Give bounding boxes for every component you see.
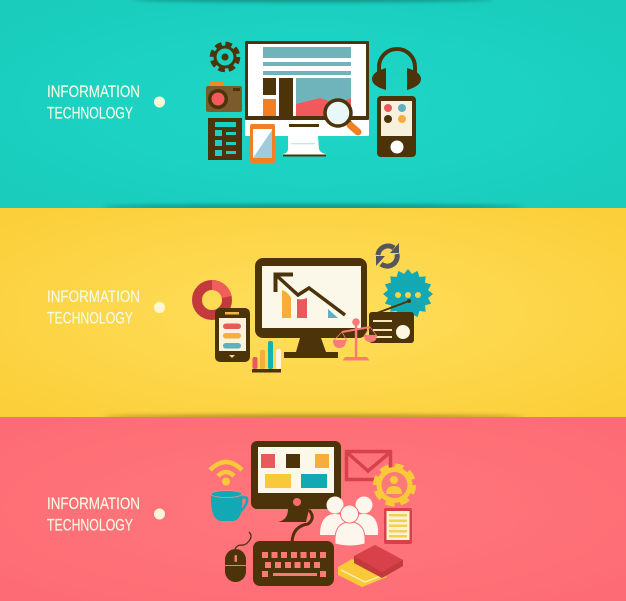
marker dot [154,508,165,520]
icon: keyboard [253,541,334,586]
icon: people [320,496,378,546]
icon: bar chart [252,341,281,372]
label: information technology [47,288,140,328]
label: information technology [47,83,140,122]
panel: yellow band [0,208,626,419]
panel: coral band [0,417,626,601]
icon: coffee cup [211,490,247,521]
icon: user gear [376,466,414,504]
marker dot [154,96,165,108]
icon: radio [369,299,414,343]
icon: mouse [225,532,251,582]
icon: refresh [376,243,399,266]
label: information technology [47,495,140,534]
icon: wifi [210,462,242,486]
icon: camera [206,82,242,112]
icon: monitor [245,41,369,156]
icon: monitor [251,441,341,542]
icon: calculator list [208,118,242,160]
icon: envelope [346,452,390,480]
label: information technology: TECHNOLOGY [47,104,133,122]
label: information technology: INFORMATION [47,288,140,306]
label: information technology: INFORMATION [47,495,140,513]
icon: document tablet [384,508,412,544]
label: information technology: INFORMATION [47,83,140,101]
label: information technology: TECHNOLOGY [47,516,133,534]
label: information technology: TECHNOLOGY [47,310,133,328]
panel: teal band [0,0,626,210]
icon: gear [212,44,238,70]
icon: scales [333,318,377,360]
icon: headphones [372,49,421,90]
marker dot [154,302,165,313]
icon: magnifier [325,100,358,132]
icon: phone [215,308,250,362]
icon: donut chart [197,280,232,315]
icon: music player [377,96,416,157]
icon: books [338,545,403,587]
icon: monitor [255,258,367,358]
icon: speech burst [383,269,433,319]
icon: smartphone [250,124,275,163]
